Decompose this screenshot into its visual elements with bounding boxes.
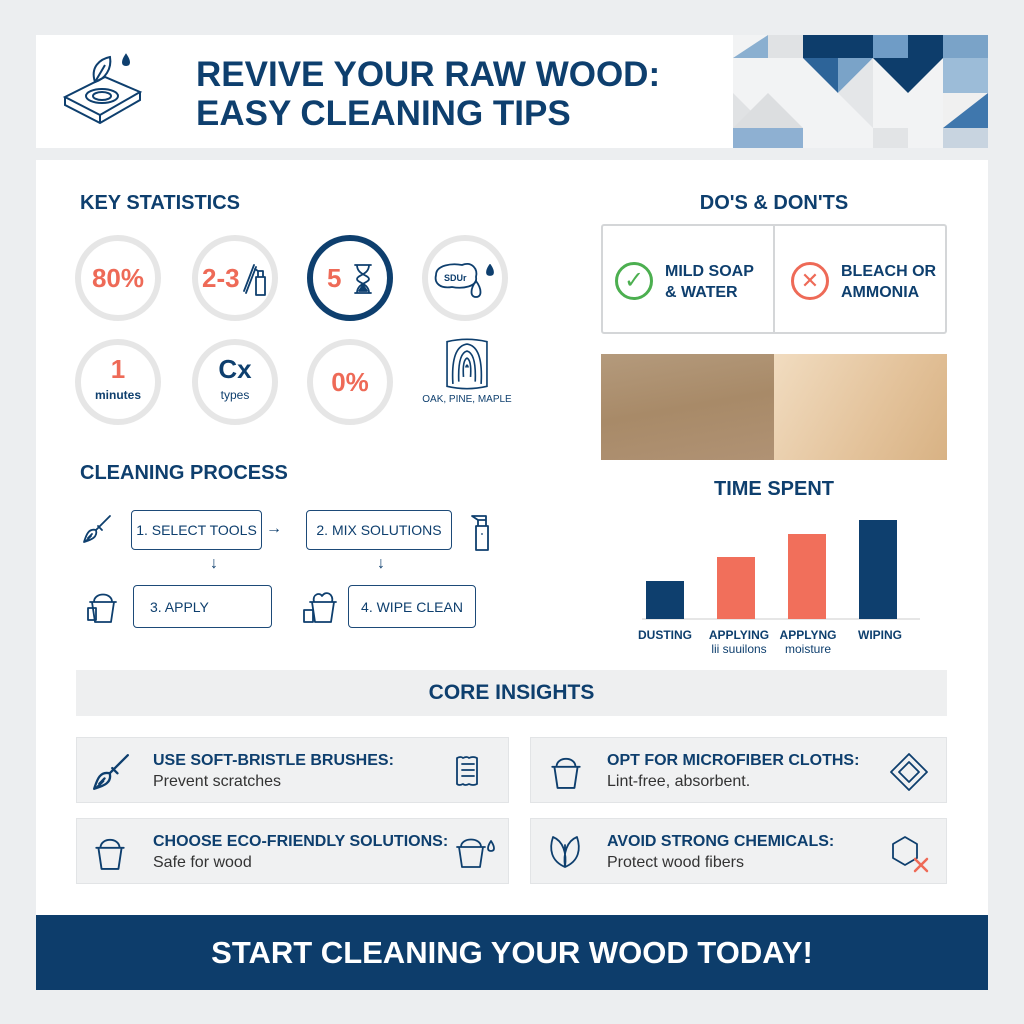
wood photos (601, 354, 947, 460)
core insights header (76, 670, 947, 716)
don't: bleach: AMMONIA (841, 284, 919, 301)
stat 80%: 80% (92, 262, 144, 292)
step 3 (133, 585, 272, 628)
stat 80% (75, 235, 161, 321)
bar chart: APPLYING (709, 628, 769, 642)
insight: avoid chemicals: Protect wood fibers (607, 854, 744, 871)
stat types: types (221, 388, 249, 402)
do: mild soap: & WATER (665, 284, 738, 301)
icon: brush (83, 515, 111, 543)
step 1: 1. SELECT TOOLS (136, 522, 257, 538)
icon: bucket (87, 594, 117, 623)
step 3: 3. APPLY (150, 598, 209, 614)
header panel (36, 35, 988, 148)
arrow down: ↓ (377, 555, 385, 572)
stat 5 hourglass: 5 (327, 262, 341, 292)
core insights header: CORE INSIGHTS (429, 681, 594, 704)
insight: microfiber (530, 737, 947, 803)
stat 2-3 (192, 235, 278, 321)
heading: time spent: TIME SPENT (714, 478, 834, 500)
insight: microfiber: OPT FOR MICROFIBER CLOTHS: (607, 752, 859, 769)
stat 1 minutes: minutes (95, 388, 141, 402)
heading: do's & don'ts: DO'S & DON'TS (700, 192, 848, 214)
insight: avoid chemicals (530, 818, 947, 884)
step 4 (348, 585, 476, 628)
stat types (192, 339, 278, 425)
bar chart: WIPING (858, 628, 902, 642)
stat 1 minutes (75, 339, 161, 425)
decorative geometric pattern (733, 35, 988, 148)
stat 2-3: 2-3 (202, 262, 240, 292)
arrow: → (266, 520, 282, 537)
stat 0%: 0% (331, 366, 369, 396)
footer banner: START CLEANING YOUR WOOD TODAY! (211, 935, 813, 970)
insight: eco-friendly: CHOOSE ECO-FRIENDLY SOLUTIONS: (153, 833, 448, 850)
heading: cleaning process: CLEANING PROCESS (80, 462, 288, 484)
title: EASY CLEANING TIPS (196, 94, 571, 133)
insight: brushes (76, 737, 509, 803)
process flow (83, 510, 489, 628)
insight: eco-friendly: Safe for wood (153, 854, 252, 871)
title (196, 55, 660, 133)
don't: bleach: ✕ (801, 268, 819, 293)
step 2 (306, 510, 452, 550)
stat 1 minutes: 1 (111, 354, 125, 384)
footer banner (36, 915, 988, 990)
step 4: 4. WIPE CLEAN (361, 598, 463, 614)
do: mild soap (603, 226, 775, 332)
stat 0% (307, 339, 393, 425)
bar chart: moisture (785, 642, 831, 656)
do: mild soap: ✓ (624, 267, 644, 294)
bar chart: DUSTING (638, 628, 692, 642)
don't: bleach (791, 262, 936, 301)
stat wood species (422, 338, 512, 405)
icon: wood board with leaf (62, 53, 142, 124)
arrow down: ↓ (210, 555, 218, 572)
don't: bleach: BLEACH OR (841, 263, 936, 280)
insight: avoid chemicals: AVOID STRONG CHEMICALS: (607, 833, 834, 850)
step 1 (131, 510, 262, 550)
icon: spray bottle (471, 515, 489, 551)
bar chart (638, 520, 920, 656)
insight: microfiber: Lint-free, absorbent. (607, 773, 750, 790)
do's & don'ts box (601, 224, 947, 334)
step 2: 2. MIX SOLUTIONS (316, 522, 442, 538)
bar chart: APPLYNG (780, 628, 836, 642)
main body panel (36, 160, 988, 915)
stat 5 hourglass (307, 235, 393, 321)
stat sponge: SDUr (444, 273, 467, 283)
insight: eco-friendly (76, 818, 509, 884)
do: mild soap: MILD SOAP (665, 263, 754, 280)
stat wood species: OAK, PINE, MAPLE (422, 394, 512, 405)
insight: brushes: USE SOFT-BRISTLE BRUSHES: (153, 752, 394, 769)
heading: key statistics: KEY STATISTICS (80, 192, 240, 214)
bar chart: lii suuilons (711, 642, 767, 656)
stat sponge (422, 235, 508, 321)
title: REVIVE YOUR RAW WOOD: (196, 55, 660, 94)
insight: brushes: Prevent scratches (153, 773, 281, 790)
stat types: Cx (218, 354, 252, 384)
icon: bucket with foam (303, 592, 337, 623)
stats circles (75, 235, 512, 425)
